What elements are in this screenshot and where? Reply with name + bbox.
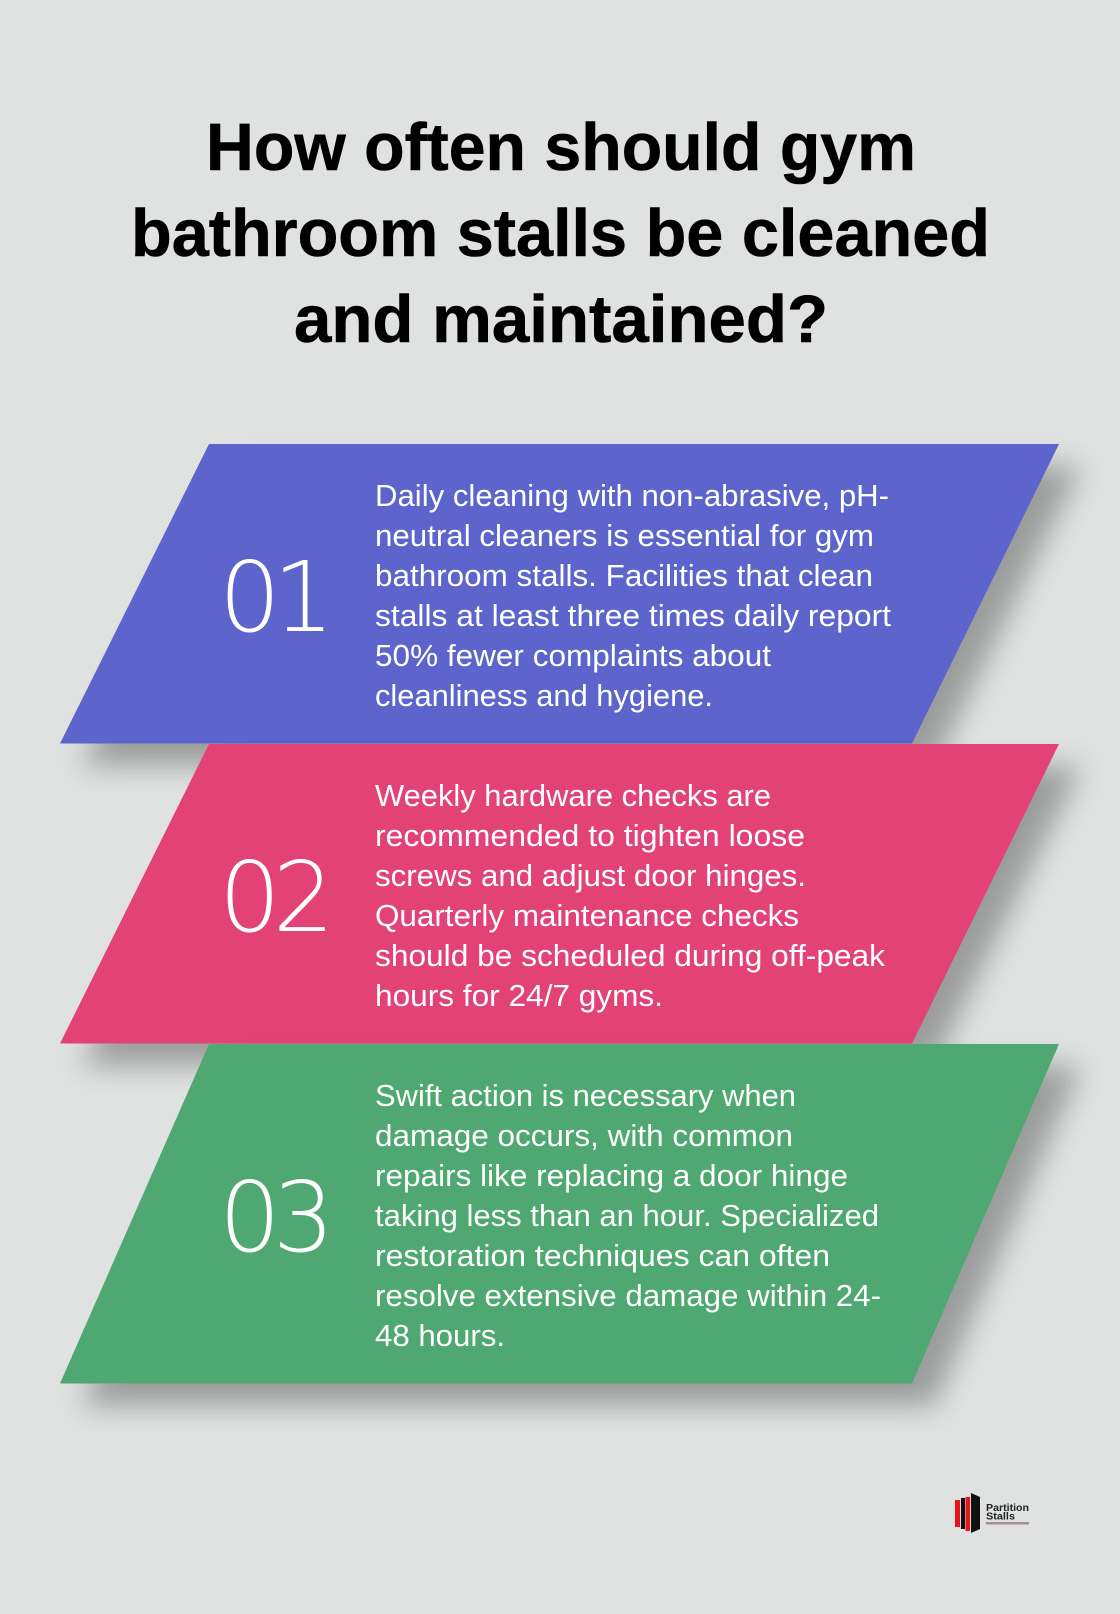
title: bathroom stalls be cleaned — [131, 196, 990, 271]
text: hardware checks: screws and adjust door hinges. — [375, 858, 806, 893]
number 02: 02 — [219, 841, 326, 954]
text: swift repairs — [375, 1078, 881, 1353]
number 01: 01 — [219, 541, 326, 654]
logo: Partition Stalls: Stalls — [986, 1510, 1015, 1522]
panel: step 02 hardware checks — [60, 744, 1081, 1066]
text: hardware checks: Quarterly maintenance checks — [375, 898, 799, 933]
text: daily cleaning: cleanliness and hygiene. — [375, 678, 713, 713]
text: swift repairs: resolve extensive damage within 24- — [375, 1278, 881, 1313]
title: and maintained? — [294, 282, 828, 357]
title: How often should gym — [206, 110, 916, 185]
title — [131, 110, 990, 357]
text: daily cleaning — [375, 478, 891, 713]
text: swift repairs: taking less than an hour. Specialized — [375, 1198, 879, 1233]
number 03: 03 — [219, 1161, 326, 1274]
panel: step 03 swift repairs — [60, 1044, 1081, 1406]
text: swift repairs: 48 hours. — [375, 1318, 505, 1353]
text: swift repairs: damage occurs, with common — [375, 1118, 793, 1153]
text: hardware checks — [375, 778, 885, 1013]
logo: Partition Stalls — [955, 1493, 1029, 1533]
text: hardware checks: recommended to tighten loose — [375, 818, 805, 853]
text: swift repairs: restoration techniques can often — [375, 1238, 830, 1273]
text: daily cleaning: stalls at least three times daily report — [375, 598, 891, 633]
icon: partition bars — [955, 1493, 980, 1533]
text: swift repairs: Swift action is necessary when — [375, 1078, 796, 1113]
text: swift repairs: repairs like replacing a door hinge — [375, 1158, 848, 1193]
text: hardware checks: Weekly hardware checks are — [375, 778, 771, 813]
logo: Partition Stalls: Partition — [986, 1502, 1029, 1514]
text: daily cleaning: bathroom stalls. Facilities that clean — [375, 558, 873, 593]
text: daily cleaning: Daily cleaning with non-abrasive, pH- — [375, 478, 889, 513]
text: hardware checks: should be scheduled during off-peak — [375, 938, 885, 973]
text: daily cleaning: neutral cleaners is essential for gym — [375, 518, 874, 553]
panel: step 01 daily cleaning — [60, 444, 1081, 766]
text: daily cleaning: 50% fewer complaints about — [375, 638, 771, 673]
text: hardware checks: hours for 24/7 gyms. — [375, 978, 663, 1013]
